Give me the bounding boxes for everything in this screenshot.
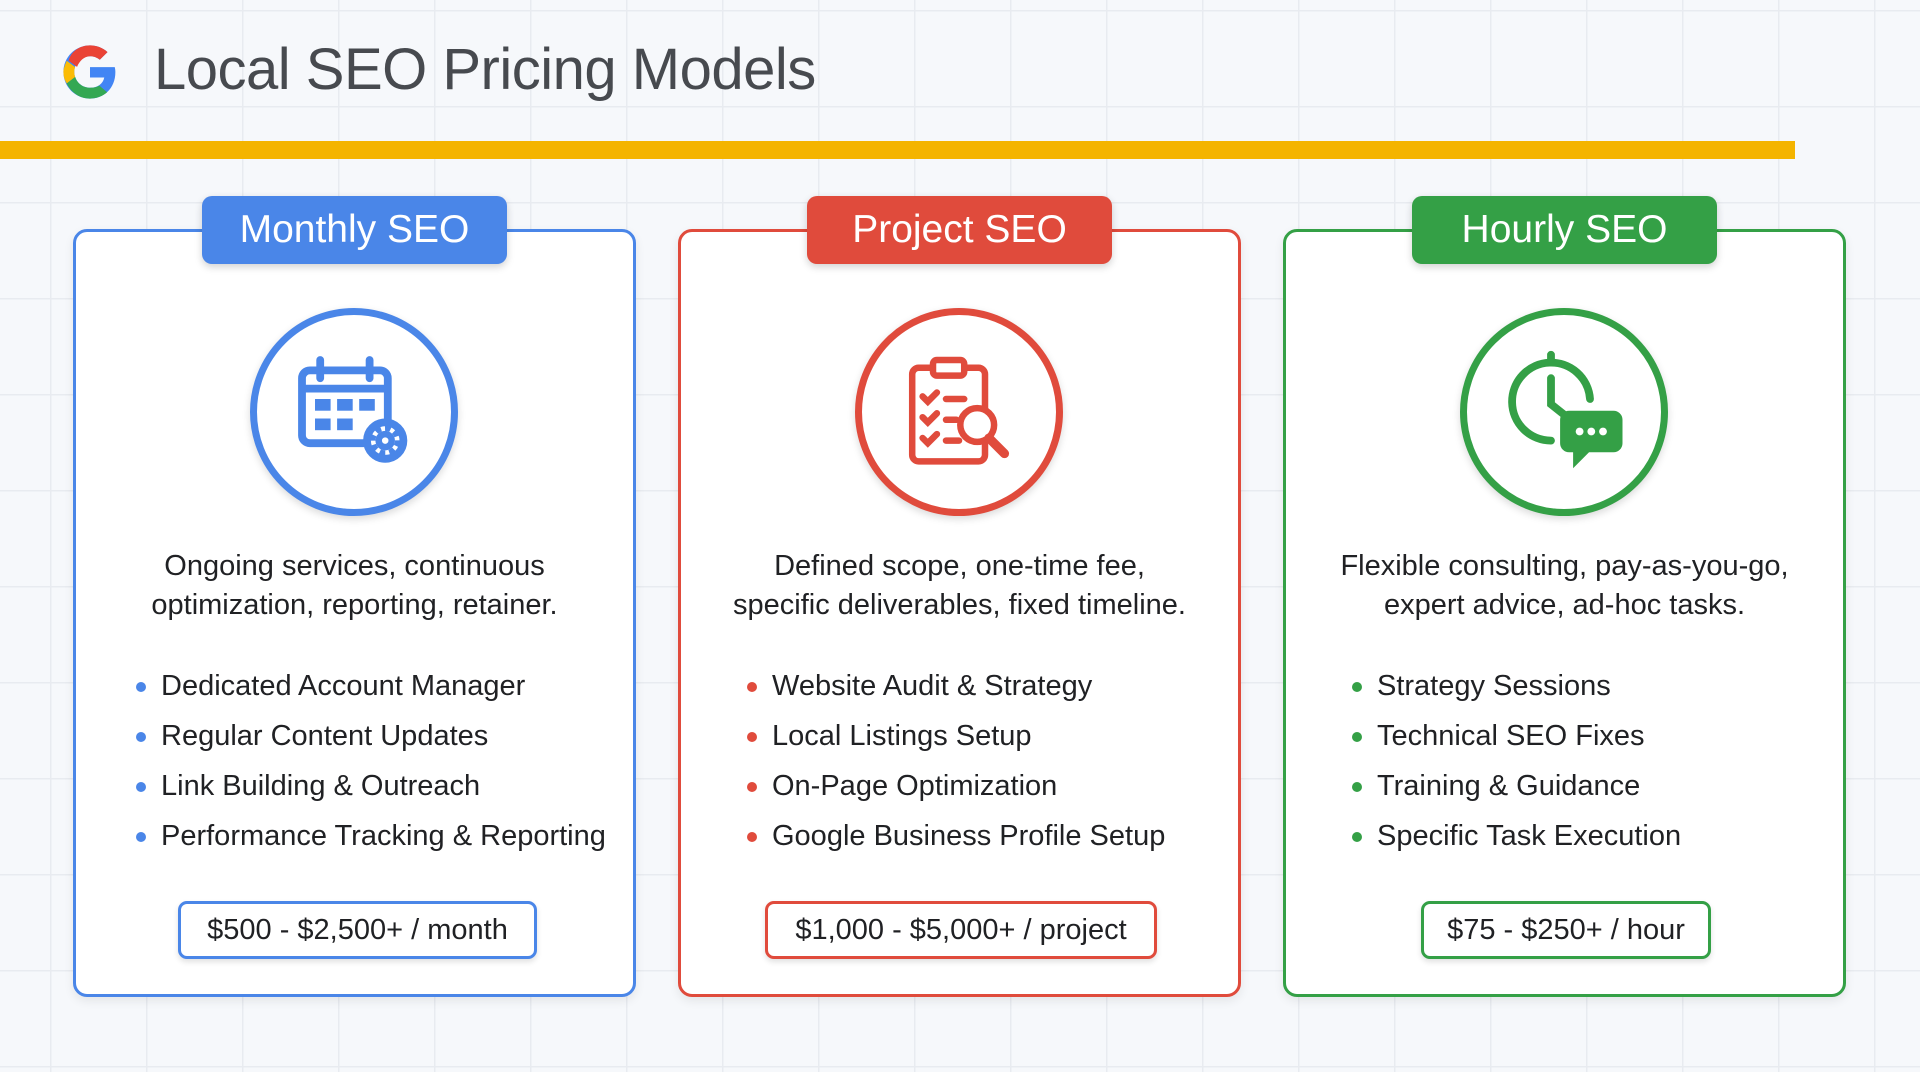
feature list: Dedicated Account Manager xyxy=(161,670,525,702)
description: Defined scope, one-time fee, xyxy=(774,550,1145,582)
panel: Hourly SEO xyxy=(1283,229,1846,997)
tab: Hourly SEO xyxy=(1412,196,1717,264)
description xyxy=(151,550,558,621)
tab: Project SEO xyxy=(807,196,1112,264)
description: optimization, reporting, retainer. xyxy=(151,589,558,621)
price xyxy=(765,901,1157,959)
feature list xyxy=(136,670,606,852)
feature list: Performance Tracking & Reporting xyxy=(161,820,606,852)
price xyxy=(1421,901,1711,959)
feature list: Training & Guidance xyxy=(1377,770,1640,802)
description: Flexible consulting, pay-as-you-go, xyxy=(1340,550,1789,582)
icon: clock with chat bubble xyxy=(1460,308,1668,516)
description: Ongoing services, continuous xyxy=(164,550,545,582)
icon: clipboard with magnifier xyxy=(855,308,1063,516)
icon: calendar with gear xyxy=(250,308,458,516)
feature list xyxy=(747,670,1165,852)
price: $500 - $2,500+ / month xyxy=(207,914,508,946)
feature list: Google Business Profile Setup xyxy=(772,820,1165,852)
price: $75 - $250+ / hour xyxy=(1447,914,1685,946)
price xyxy=(178,901,537,959)
price: $1,000 - $5,000+ / project xyxy=(795,914,1127,946)
logo: Google G xyxy=(63,45,116,99)
feature list: Local Listings Setup xyxy=(772,720,1032,752)
description xyxy=(1340,550,1789,621)
feature list: Specific Task Execution xyxy=(1377,820,1681,852)
feature list: Strategy Sessions xyxy=(1377,670,1611,702)
tab: Project SEO: Project SEO xyxy=(852,208,1067,251)
description xyxy=(733,550,1186,621)
feature list xyxy=(1352,670,1681,852)
feature list: Link Building & Outreach xyxy=(161,770,480,802)
feature list: On-Page Optimization xyxy=(772,770,1057,802)
feature list: Technical SEO Fixes xyxy=(1377,720,1645,752)
description: expert advice, ad-hoc tasks. xyxy=(1384,589,1745,621)
tab: Monthly SEO: Monthly SEO xyxy=(240,208,469,251)
title: Local SEO Pricing Models xyxy=(154,37,816,102)
panel: Project SEO xyxy=(678,229,1241,997)
description: specific deliverables, fixed timeline. xyxy=(733,589,1186,621)
panel: Monthly SEO xyxy=(73,229,636,997)
feature list: Website Audit & Strategy xyxy=(772,670,1092,702)
yellow divider bar xyxy=(0,141,1795,159)
tab: Monthly SEO xyxy=(202,196,507,264)
feature list: Regular Content Updates xyxy=(161,720,488,752)
tab: Hourly SEO: Hourly SEO xyxy=(1462,208,1667,251)
